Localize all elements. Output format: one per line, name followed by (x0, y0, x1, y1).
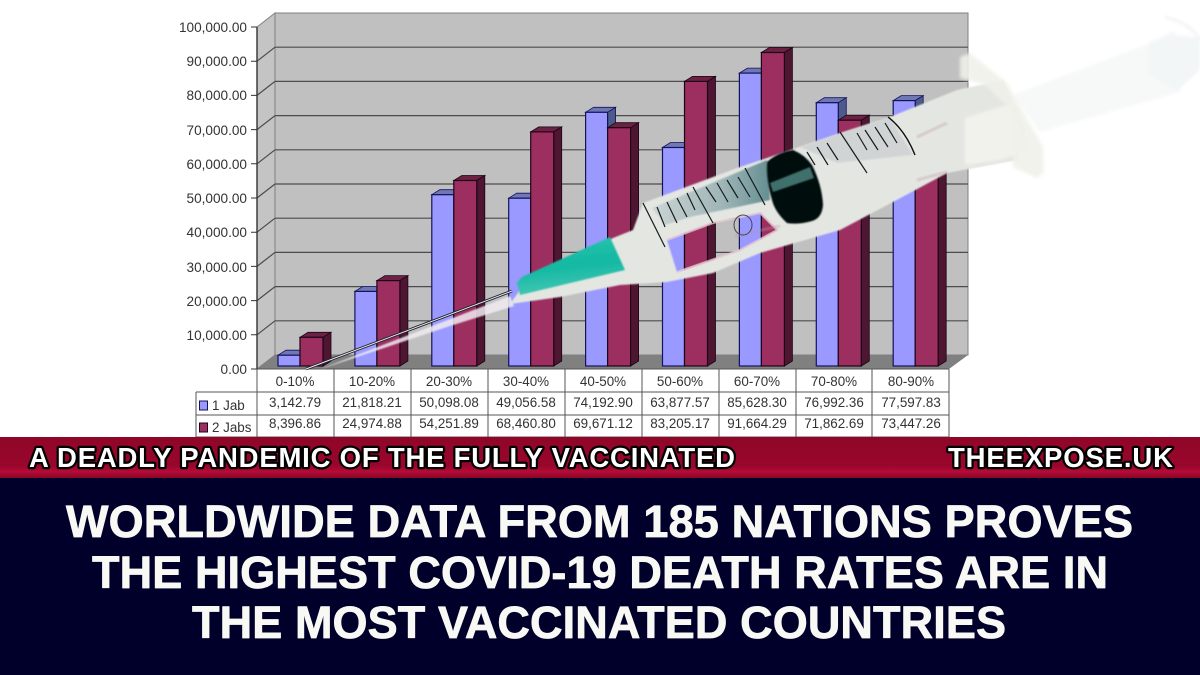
banner text: left: A DEADLY PANDEMIC OF THE FULLY VACCINATED (29, 442, 735, 473)
table header row: 30-40% (503, 374, 549, 389)
bars: 40-50% (586, 107, 639, 366)
needle (306, 291, 512, 369)
headline: THE MOST VACCINATED COUNTRIES (192, 597, 1006, 648)
data table (196, 369, 949, 437)
table row: 1 Jab: 74,192.90 (573, 395, 633, 410)
panel: navy background (0, 478, 1200, 675)
headline (66, 496, 1133, 648)
table row: 1 Jab: 77,597.83 (881, 395, 941, 410)
table row: 1 Jab: 76,992.36 (804, 395, 864, 410)
table row: 1 Jab: 1 Jab (212, 398, 245, 413)
headline: WORLDWIDE DATA FROM 185 NATIONS PROVES (66, 496, 1133, 547)
table row: 2 Jabs: 71,862.69 (804, 416, 864, 431)
vial logo mark (734, 215, 752, 235)
table row: 2 Jabs: 91,664.29 (727, 416, 787, 431)
teal needle hub (517, 237, 625, 295)
table row: 2 Jabs: 2 Jabs (212, 420, 252, 435)
table row: 1 Jab: 50,098.08 (419, 395, 479, 410)
table header row: 70-80% (811, 374, 857, 389)
table row: 2 Jabs: 73,447.26 (881, 416, 941, 431)
plunger stopper (767, 150, 823, 224)
barrel pink marks (735, 123, 947, 236)
table row: 2 Jabs: 24,974.88 (342, 416, 402, 431)
y axis labels: 10,000.00 (187, 328, 247, 343)
syringe flange (960, 53, 1044, 178)
table header row: 0-10% (276, 374, 314, 389)
table row: 2 Jabs: 54,251.89 (419, 416, 479, 431)
table row: 2 Jabs: 8,396.86 (269, 416, 321, 431)
table row: 1 Jab: 63,877.57 (650, 395, 710, 410)
table row: 1 Jab: 21,818.21 (342, 395, 402, 410)
needle glow (318, 296, 514, 370)
table row: 1 Jab (200, 395, 941, 413)
icon: syringe (306, 17, 1200, 370)
table row: 2 Jabs (200, 416, 941, 435)
bars: 20-30% (432, 176, 485, 366)
y axis labels: 20,000.00 (187, 294, 247, 309)
syringe plunger rod (1013, 17, 1200, 132)
window rim tint (667, 213, 777, 272)
y axis labels: 60,000.00 (187, 157, 247, 172)
table header row: 10-20% (349, 374, 395, 389)
bars: 80-90% (893, 96, 946, 366)
chart plot walls (251, 13, 968, 369)
table row: 2 Jabs: 83,205.17 (650, 416, 710, 431)
y axis labels: 30,000.00 (187, 260, 247, 275)
y axis labels: 0.00 (221, 362, 247, 377)
bars: 70-80% (816, 98, 869, 366)
table header row (276, 374, 934, 389)
table header row: 50-60% (657, 374, 703, 389)
y axis labels: 50,000.00 (187, 191, 247, 206)
table row: 1 Jab: 3,142.79 (269, 395, 321, 410)
table row: 1 Jab: 85,628.30 (727, 395, 787, 410)
y axis labels (179, 20, 247, 377)
y axis labels: 80,000.00 (187, 88, 247, 103)
table header row: 40-50% (580, 374, 626, 389)
banner: red strip (0, 437, 1200, 478)
table row: 1 Jab: 49,056.58 (496, 395, 556, 410)
y axis labels: 100,000.00 (179, 20, 247, 35)
table header row: 80-90% (888, 374, 934, 389)
tinted graduation band left (652, 160, 770, 225)
table row: 2 Jabs: 68,460.80 (496, 416, 556, 431)
banner text: site name: THEEXPOSE.UK (948, 442, 1173, 473)
y axis labels: 40,000.00 (187, 225, 247, 240)
bars: 50-60% (662, 76, 716, 366)
headline: THE HIGHEST COVID-19 DEATH RATES ARE IN (92, 547, 1108, 598)
syringe barrel with window (510, 80, 1025, 304)
bar chart (179, 13, 968, 377)
bars: 60-70% (739, 48, 792, 366)
y axis labels: 70,000.00 (187, 123, 247, 138)
y axis labels: 90,000.00 (187, 54, 247, 69)
stopper highlight band (770, 167, 814, 192)
bars: 30-40% (509, 127, 562, 366)
bars: 0-10% (278, 332, 331, 366)
tinted graduation band right (800, 117, 913, 163)
table row: 2 Jabs: 69,671.12 (573, 416, 633, 431)
bright barrel highlight (965, 103, 1030, 165)
bars: 10-20% (355, 276, 408, 366)
barrel graduation ticks (643, 123, 897, 247)
table header row: 60-70% (734, 374, 780, 389)
table header row: 20-30% (426, 374, 472, 389)
